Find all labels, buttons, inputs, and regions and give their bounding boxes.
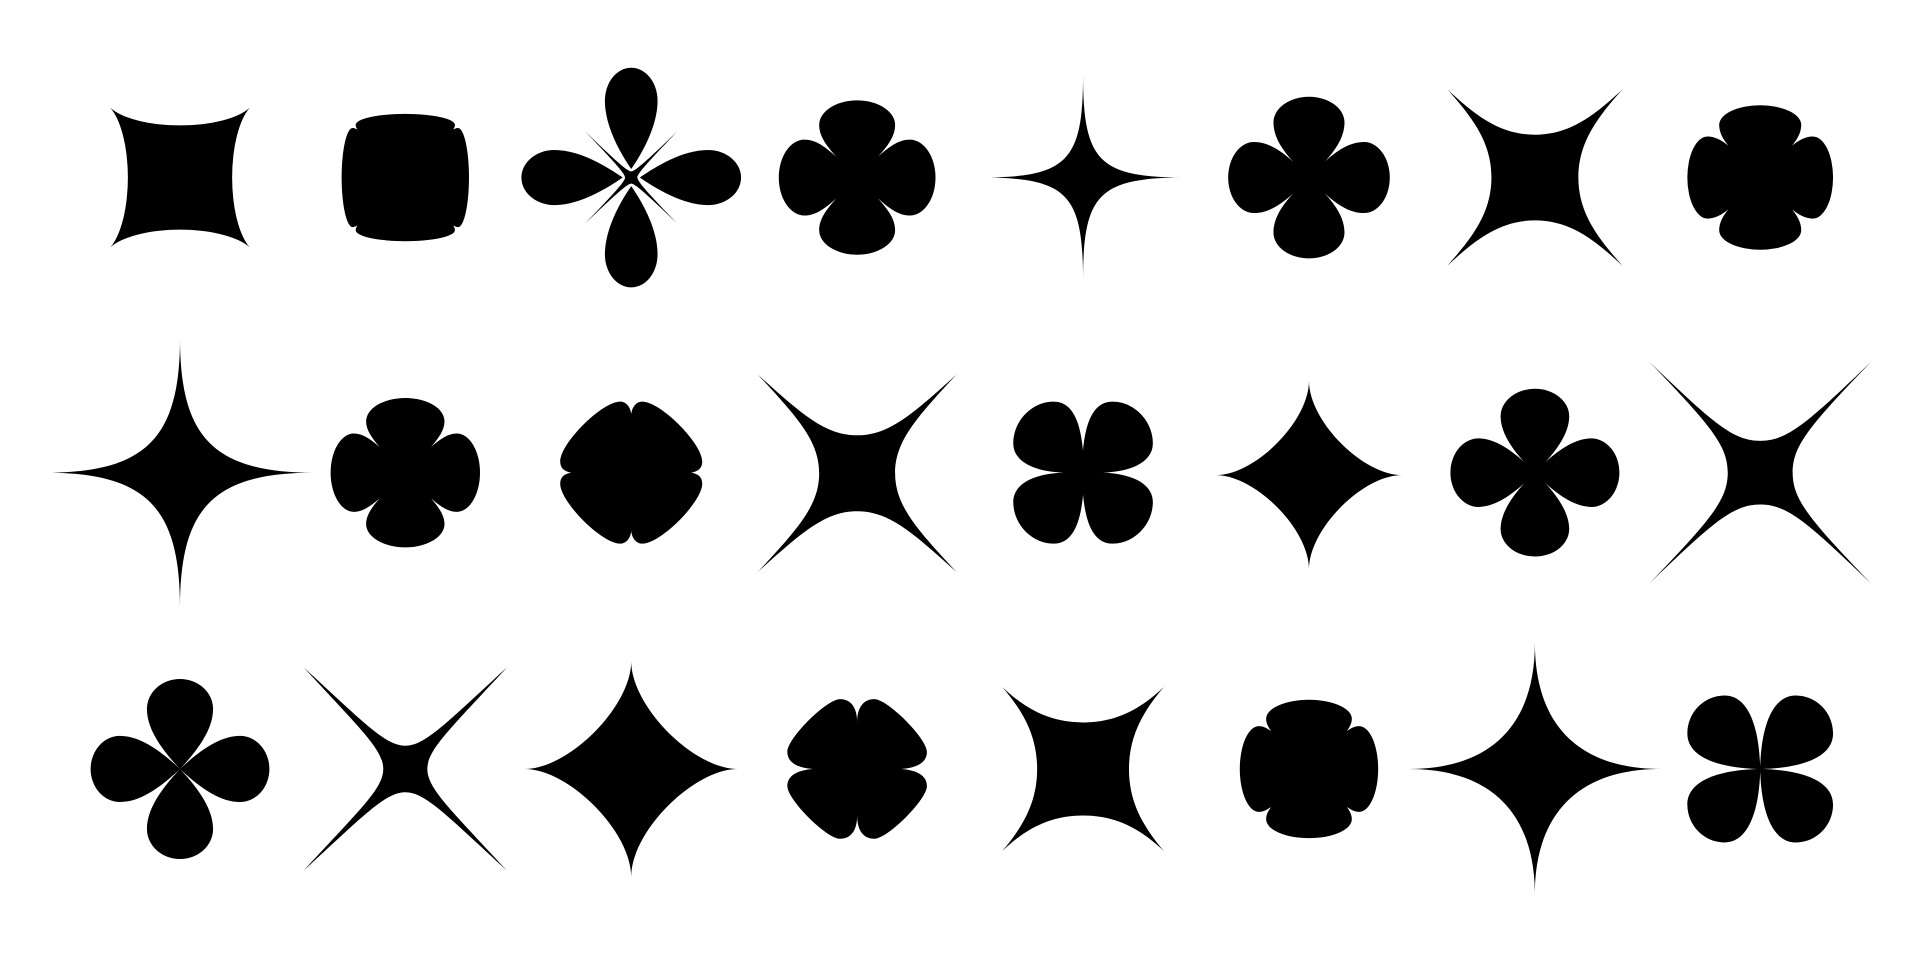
icon: wide clover r3c6 (1240, 700, 1378, 838)
icon: clover r1c4 (779, 100, 936, 255)
icon: clover r2c2 (331, 398, 480, 547)
icon: clover r1c6 (1228, 97, 1390, 258)
icon: concave square r3c5 (1002, 687, 1164, 851)
icon: concave square r1c1 (110, 108, 250, 247)
icon: long concave X r2c8 (1649, 362, 1871, 583)
icon: needle X r3c2 (304, 667, 507, 871)
icon: large sparkle r2c1 (45, 338, 315, 607)
icon: diamond star r2c6 (1216, 381, 1402, 569)
icon: concave X r2c4 (758, 375, 956, 572)
icon: squircle clover r1c2 (342, 114, 469, 241)
icon: diagonal lobes r3c4 (787, 699, 927, 839)
icon: teardrop clover r2c7 (1450, 389, 1619, 557)
icon: spiked teardrop flower r1c3 (521, 68, 741, 287)
icon: large sparkle r3c7 (1409, 643, 1661, 895)
icon: four diagonal petals r3c8 (1687, 696, 1833, 842)
icon: concave diamond r1c7 (1447, 89, 1622, 266)
icon: thin sparkle r1c5 (980, 75, 1186, 280)
icon: teardrop clover r3c1 (91, 679, 269, 859)
icon: diagonal lobes r2c3 (560, 402, 702, 544)
icon: wide clover r1c8 (1687, 105, 1833, 250)
icon: four diagonal petals r2c5 (1013, 402, 1153, 544)
icon: diamond star r3c3 (525, 661, 738, 877)
